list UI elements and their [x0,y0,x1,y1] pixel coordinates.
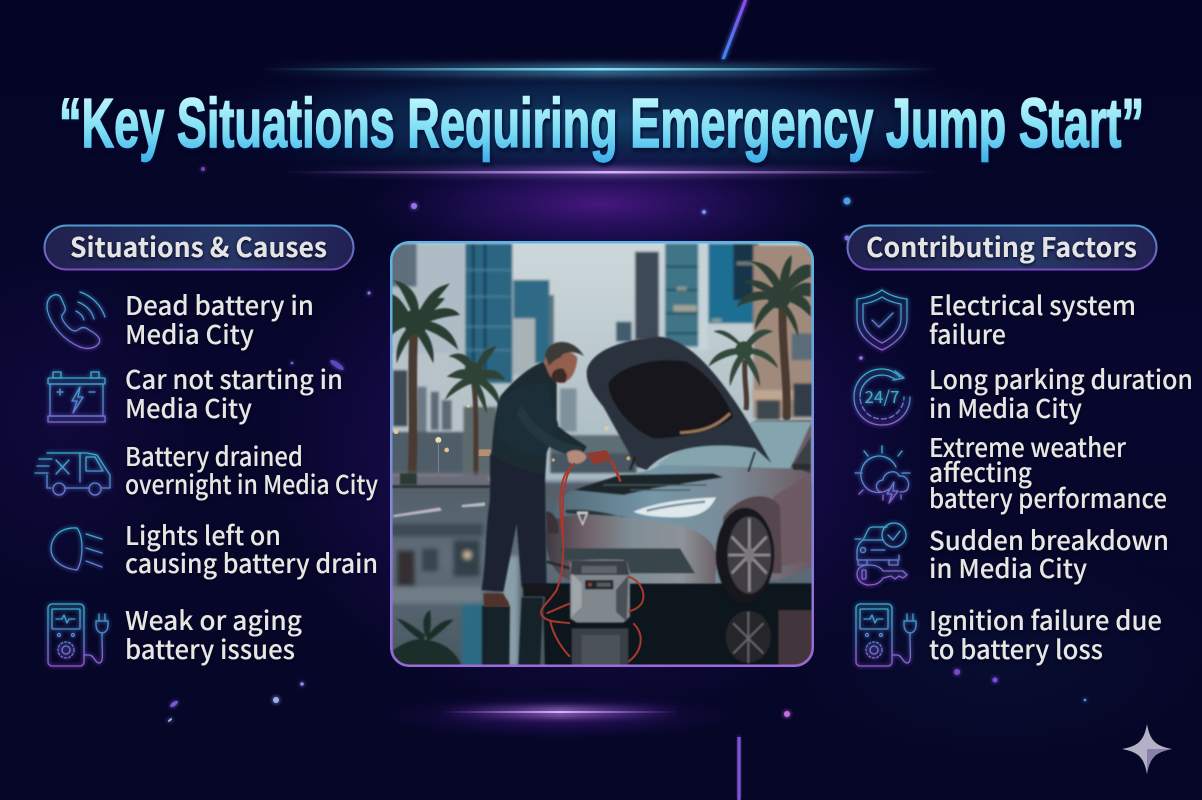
photo: technician jump starting a car [390,240,820,672]
light streak top [723,0,746,58]
icon: headlight [51,528,102,570]
text: dead battery: Dead battery in [125,286,314,323]
text: battery drained: overnight in Media City [125,465,378,502]
purple light line under title [280,167,940,177]
street lights [394,404,630,485]
icon: weather [855,446,910,503]
top cyan light line [260,63,940,77]
text: long parking duration: Long parking duration [929,360,1193,397]
icon: shield [857,290,907,350]
heading: contributing factors: Contributing Factors [866,226,1137,265]
text: weak or aging battery [125,601,302,667]
wet road and reflections [390,473,820,672]
particles [167,167,1086,722]
text: weak or aging battery: Weak or aging [125,601,302,638]
icon: phone [47,292,105,348]
heading: situations and causes: Situations & Causes [70,226,327,265]
man reflection [482,597,543,667]
palm reflection and road markings [390,473,490,667]
text: lights left on: causing battery drain [125,544,378,581]
text: long parking duration: in Media City [929,389,1082,426]
text: lights left on [125,516,378,581]
text: ignition failure [929,601,1162,667]
text: sudden breakdown: Sudden breakdown [929,521,1169,558]
text: electrical system failure: Electrical system [929,286,1136,323]
text: dead battery: Media City [125,315,254,352]
icon: car and key [855,523,907,585]
light streak bottom [738,737,740,800]
text: battery drained [125,437,378,502]
bottom purple light line [440,706,680,718]
icon: 24/7 clock: 24/7 [865,383,899,408]
panel: contributing factors list [854,286,1193,667]
icon: van [35,453,110,495]
text: ignition failure: to battery loss [929,630,1103,667]
text: electrical system failure [929,286,1136,352]
car [546,337,812,602]
panel: situations and causes list [35,286,378,667]
text: car not starting [125,360,343,426]
jump starter box [570,560,630,667]
red jumper cables [541,450,643,662]
icon: battery [48,372,105,422]
icon: battery tester [48,604,108,666]
text: ignition failure: Ignition failure due [929,601,1162,638]
text: extreme weather [929,428,1167,516]
city background [390,240,820,483]
text: sudden breakdown: in Media City [929,549,1087,586]
technician [482,342,587,607]
dark ground under the car [543,583,820,670]
palms [390,255,811,477]
text: extreme weather: Extreme weather [929,428,1126,465]
text: weak or aging battery: battery issues [125,630,295,667]
text: dead battery [125,286,314,352]
text: extreme weather: affecting [929,453,1032,490]
icon: sparkle watermark [1122,724,1172,774]
icon: 24/7 clock [854,369,910,425]
wheel reflection [726,610,813,667]
text: extreme weather: battery performance [929,479,1167,516]
icon: battery tester [856,604,916,666]
text: sudden breakdown [929,521,1169,586]
text: car not starting: Media City [125,389,252,426]
text: battery drained: Battery drained [125,437,303,474]
text: lights left on: Lights left on [125,516,281,553]
text: long parking duration [929,360,1193,426]
text: electrical system failure: failure [929,315,1006,352]
text: car not starting: Car not starting in [125,360,343,397]
